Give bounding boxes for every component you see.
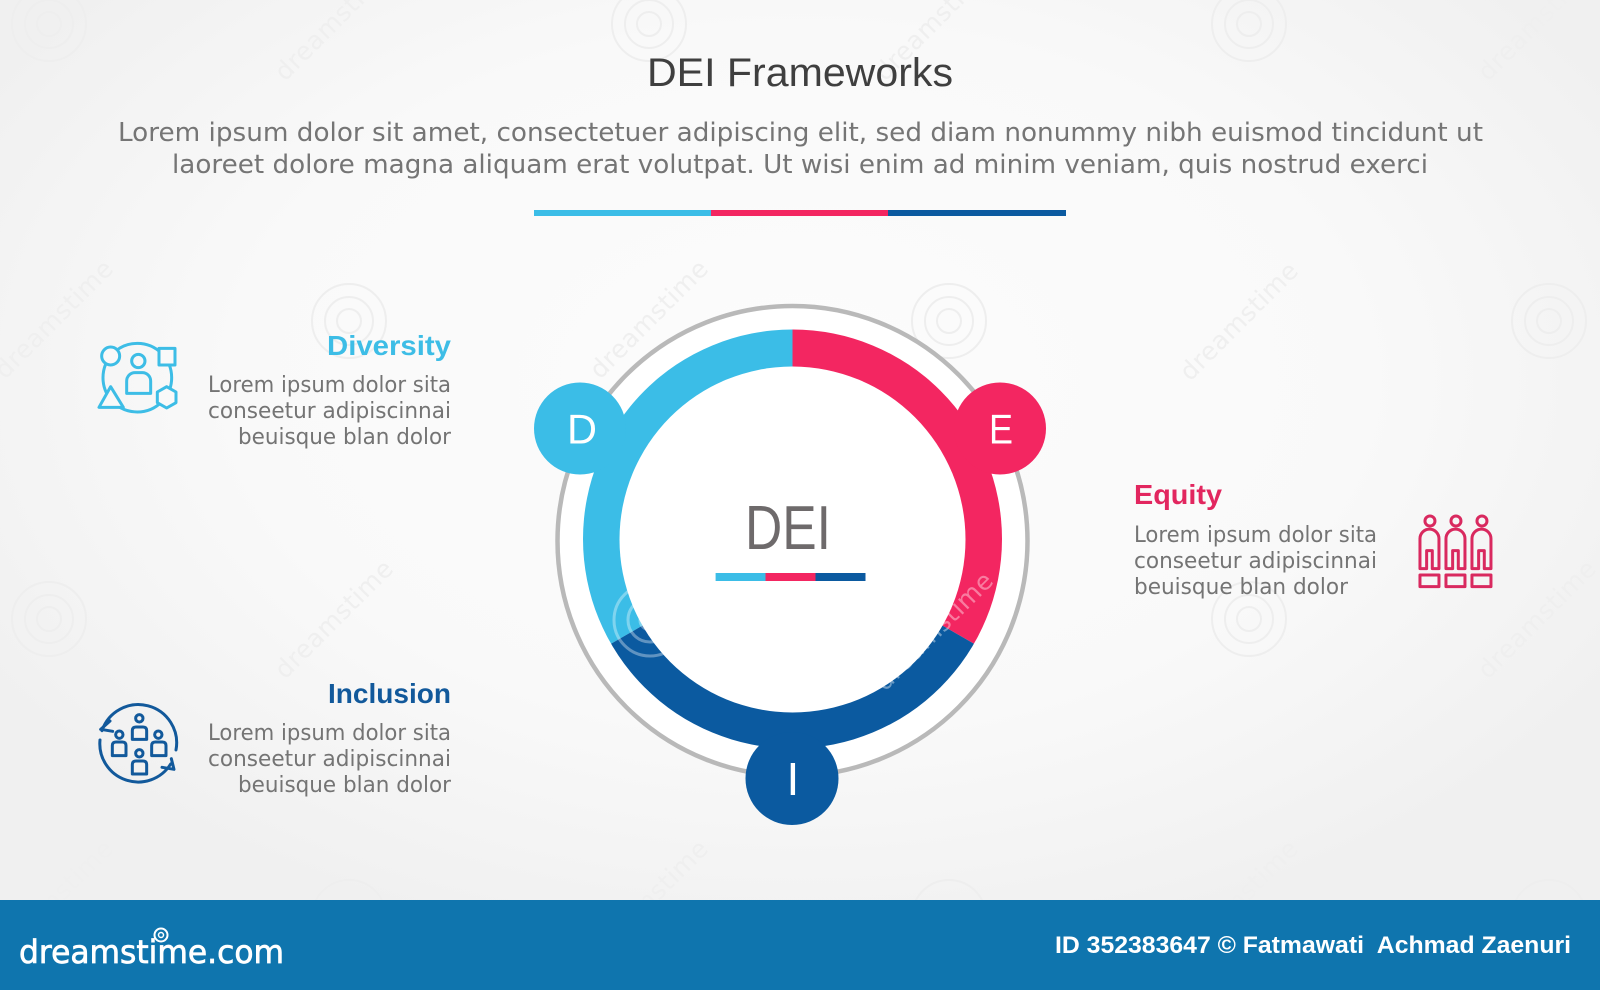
- heading: Equity: Equity: [1134, 479, 1222, 510]
- centre tricolor divider: [716, 573, 866, 581]
- text: Inclusion description: [208, 721, 452, 798]
- text: Inclusion description: beuisque blan dolor: [238, 773, 452, 798]
- badge E: [954, 382, 1046, 474]
- tri-colour donut ring: [583, 330, 1002, 746]
- badge D: [534, 382, 626, 474]
- text: Equity description: [1134, 523, 1377, 600]
- text: Inclusion description: conseetur adipiscinnai: [208, 747, 451, 772]
- text: Equity description: beuisque blan dolor: [1134, 575, 1349, 600]
- text: dreamstime: [269, 554, 399, 684]
- badge E: E: [989, 406, 1013, 452]
- icon: diversity shapes: [99, 343, 176, 412]
- footer logo: dreamstime.com: [19, 933, 284, 971]
- centre label DEI: DEI: [745, 494, 831, 563]
- footer credit: ID 352383647 © Fatmawati Achmad Zaenuri: [1055, 932, 1571, 959]
- text: Diversity description: Lorem ipsum dolor sita: [208, 373, 451, 398]
- panel: Diversity: [99, 330, 452, 450]
- badge D: D: [567, 406, 597, 452]
- text: Diversity description: conseetur adipiscinnai: [208, 399, 451, 424]
- panel: Inclusion: [100, 678, 452, 798]
- text: Inclusion description: Lorem ipsum dolor sita: [208, 721, 451, 746]
- text: Equity description: Lorem ipsum dolor sita: [1134, 523, 1377, 548]
- text: dreamstime: [1174, 256, 1304, 386]
- text: dreamstime: [1472, 554, 1600, 684]
- text: dreamstime: [584, 254, 714, 384]
- header tricolor divider: [534, 210, 1066, 216]
- circular DEI diagram: [534, 304, 1046, 825]
- text: Diversity description: beuisque blan dolor: [238, 425, 452, 450]
- panel: Equity: [1134, 479, 1491, 600]
- text: dreamstime: [1174, 834, 1304, 964]
- heading: Inclusion: Inclusion: [328, 678, 451, 709]
- heading: Diversity: Diversity: [327, 330, 451, 361]
- title: DEI Frameworks: [647, 51, 953, 95]
- watermark over ring: [614, 566, 999, 696]
- badge I: [746, 732, 838, 825]
- watermark over ring: dreamstime: [869, 566, 999, 696]
- text: Equity description: conseetur adipiscinnai: [1134, 549, 1377, 574]
- subtitle text: laoreet dolore magna aliquam erat volutpat. Ut wisi enim ad minim veniam, quis nostrud exerci: [172, 150, 1428, 180]
- subtitle text: Lorem ipsum dolor sit amet, consectetuer adipiscing elit, sed diam nonummy nibh euismod tincidunt ut: [118, 118, 1483, 148]
- badge I: I: [786, 753, 799, 805]
- outer gray ring: [558, 306, 1028, 776]
- text: dreamstime: [584, 834, 714, 964]
- subtitle text: [118, 118, 1483, 180]
- text: Diversity description: [208, 373, 452, 450]
- footer bar: [0, 900, 1600, 990]
- icon: inclusion people cycle: [100, 705, 177, 782]
- centre white disc: [620, 366, 966, 712]
- icon: equity three figures: [1420, 516, 1491, 587]
